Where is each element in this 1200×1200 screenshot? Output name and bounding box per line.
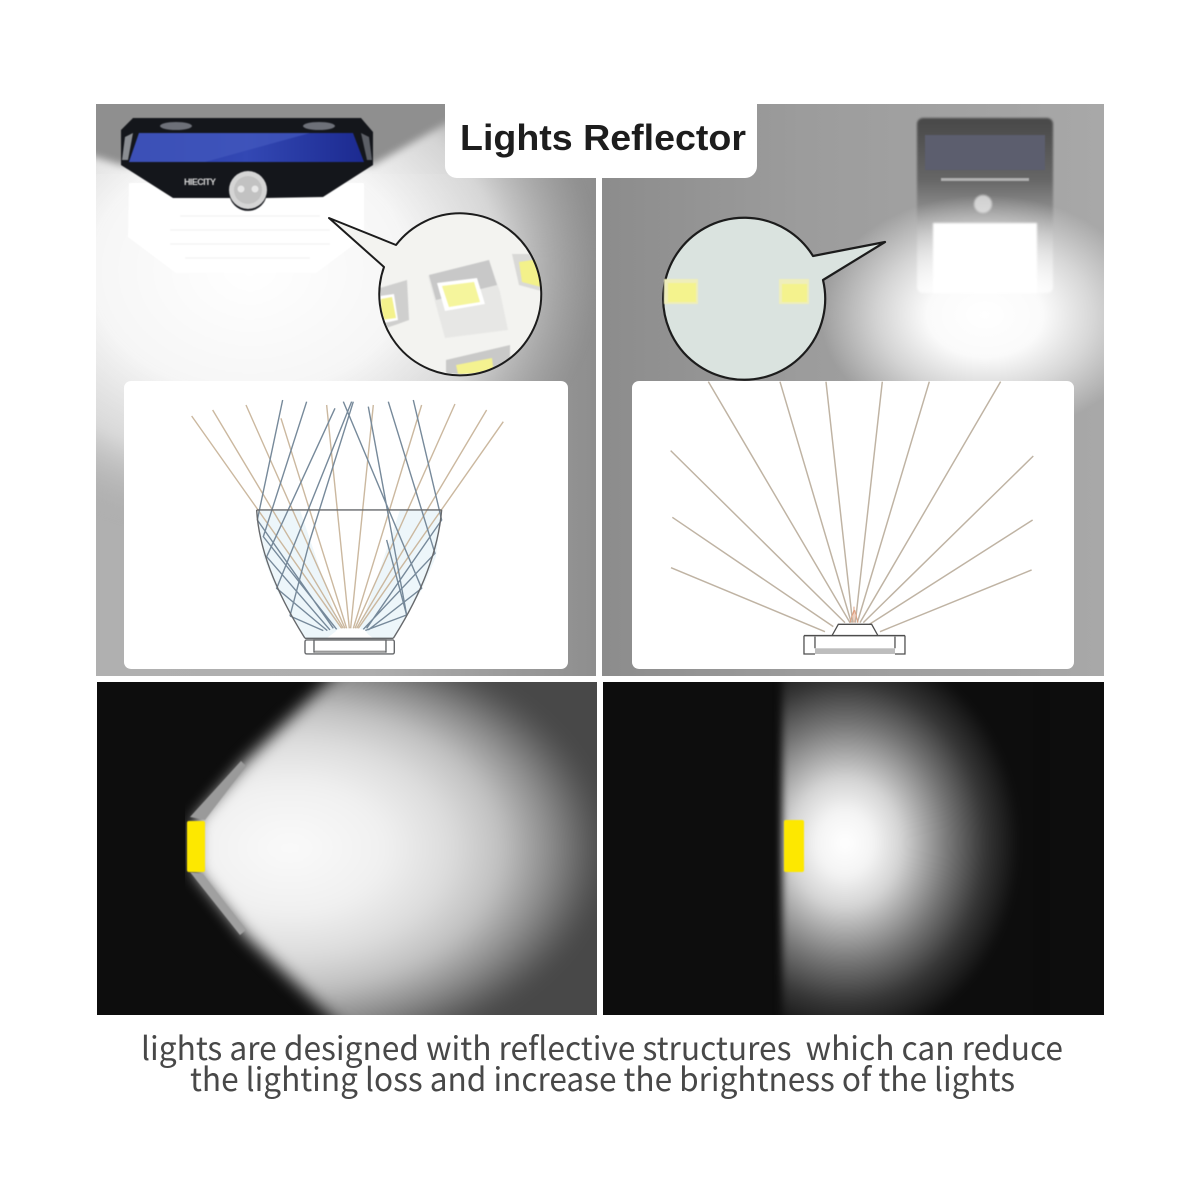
title: Lights Reflector bbox=[460, 117, 746, 158]
panel: white diagram card, reflector rays bbox=[124, 381, 568, 669]
icon: yellow LED bbox=[784, 820, 804, 872]
panel: ordinary lamp, right bbox=[602, 104, 1150, 676]
light beam: diffuse bbox=[776, 682, 1012, 1015]
chart: plain ray diagram bbox=[671, 382, 1033, 654]
caption text: the lighting loss and increase the brightness of the lights bbox=[190, 1055, 1015, 1101]
callout: reflector LED close-up bbox=[329, 213, 545, 380]
caption text bbox=[141, 1024, 1063, 1101]
icon: plain solar light bbox=[829, 116, 1104, 407]
chart: reflector ray diagram bbox=[192, 400, 503, 654]
panel: white diagram card, plain rays bbox=[632, 381, 1074, 669]
panel: beam without reflector bbox=[603, 682, 1104, 1015]
icon: solar light with LED panel bbox=[120, 117, 374, 212]
title tab bbox=[445, 100, 757, 178]
panel: reflector lamp, left bbox=[80, 104, 620, 676]
light beam: wide directed bbox=[185, 682, 597, 1015]
icon: solar light with LED panel: HIECITY bbox=[184, 177, 216, 187]
callout: ordinary LED close-up bbox=[663, 218, 885, 380]
caption text: lights are designed with reflective structures which can reduce bbox=[141, 1024, 1063, 1070]
panel: beam with reflector bbox=[97, 682, 597, 1015]
icon: reflector walls and yellow LED bbox=[187, 761, 246, 935]
